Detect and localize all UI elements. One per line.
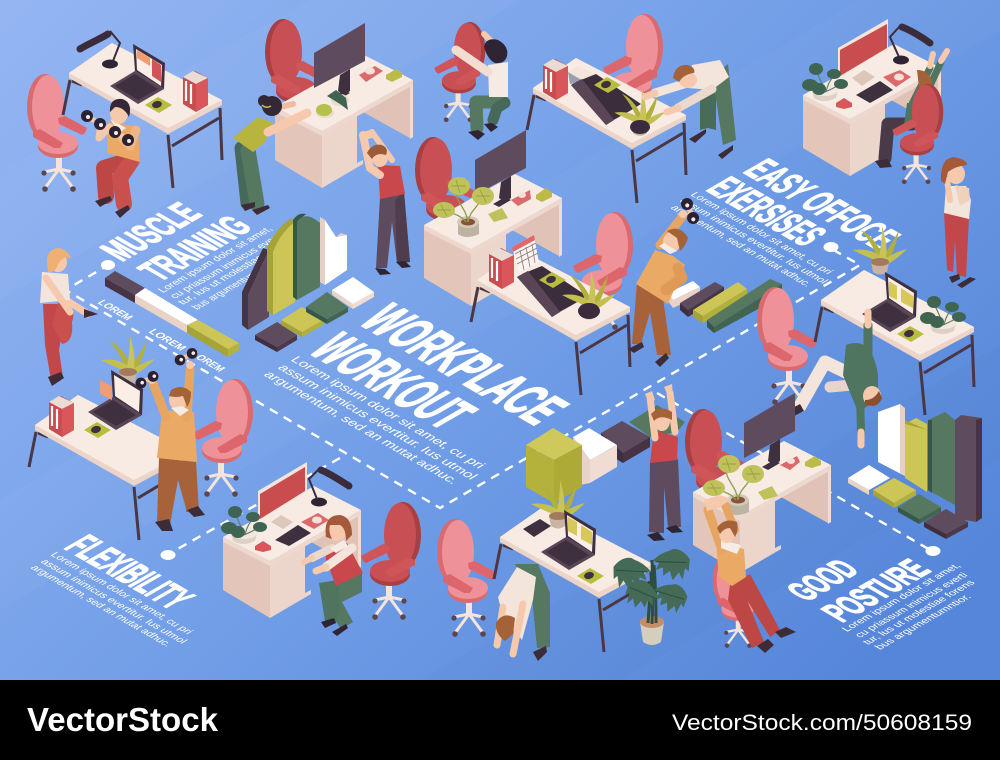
text block: flexibility: assum inimicus evertitur. Ius utmol — [37, 558, 189, 646]
chart: horizontal isometric bars with labels: LOREM — [145, 327, 189, 353]
text block: main description — [260, 354, 489, 486]
scene: solid desk with monitor and bending woman — [233, 19, 413, 215]
person: man lifting dumbbells overhead — [134, 342, 205, 531]
text block: flexibility: argumentum, sed an mutat adhuc. — [27, 564, 174, 649]
scene: bottom-right desk with plant — [685, 393, 831, 573]
chart: 3D block bars — [526, 405, 685, 503]
person: woman side stretch — [360, 129, 411, 275]
chart: tall isometric columns with slabs — [242, 214, 374, 352]
scene: solid desk with red screen and woman seated — [802, 19, 947, 184]
heading: Workplace Workout: WORKOUT — [296, 325, 490, 437]
heading: Flexibility: FLEXIBILITY — [55, 529, 204, 615]
person: seated woman hands behind head — [456, 34, 508, 140]
icon: calendar — [512, 235, 539, 272]
person: seated with arms up — [875, 51, 947, 168]
scene: center solid desk with plant — [415, 130, 562, 306]
heading: Good Posture — [778, 554, 940, 628]
text block: easy office exercises: assum inimicus evertitur. Ius utmol — [676, 197, 830, 286]
watermark band: VectorStock — [27, 701, 219, 738]
text block: easy office exercises: argumentum, sed an mutat adhuc. — [667, 204, 814, 289]
text block: good posture: bus argumentumntior. — [873, 593, 974, 652]
person: man dumbbell side stretch — [628, 196, 706, 367]
chart: horizontal isometric bars with labels — [94, 271, 239, 374]
text block: good posture: tur, lus ut molestiae forens — [861, 579, 978, 647]
scene: bottom-left desk and woman squatting — [221, 462, 421, 636]
person: seated man arms up — [704, 495, 796, 653]
person: woman stretching leg left — [40, 248, 98, 386]
icon: desk lamp — [309, 469, 349, 506]
heading: Workplace Workout: WORKPLACE — [346, 296, 582, 433]
text block: main description: Lorem ipsum dolor sit amet, cu pri — [287, 354, 489, 471]
scene: right desk with laptop and yoga woman — [757, 226, 974, 445]
person: woman arms raised — [645, 384, 683, 541]
scene: left desk with laptop and man lifting dumbbells — [29, 336, 253, 540]
text block: flexibility: Lorem ipsum dolor sit amet, cu pri — [47, 551, 195, 636]
person: man bending to desk — [645, 60, 736, 159]
text block: muscle training: cu priassum inimicus everti — [168, 232, 286, 301]
text block: good posture — [840, 562, 978, 652]
icon: desk lamp — [890, 26, 930, 64]
text block: good posture: Lorem ipsum dolor sit amet, — [840, 562, 964, 634]
scene: bottom desk with laptop, forward bend man — [437, 480, 653, 661]
text block: main description: argumentum, sed an mutat adhuc. — [260, 369, 463, 486]
text block: muscle training: tur, lus ut molestiae forens — [176, 237, 296, 307]
text block: easy office exercises: Lorem ipsum dolor sit amet, cu pri — [687, 191, 835, 276]
scene: desk with laptop and man lifting dumbbells — [27, 31, 222, 218]
watermark band — [0, 680, 1000, 760]
text block: muscle training: Lorem ipsum dolor sit amet, — [156, 225, 276, 295]
scene: woman stretching on chair — [434, 22, 508, 140]
icon: calculator — [523, 519, 551, 537]
person: woman squatting — [304, 515, 363, 636]
heading: Muscle Training: TRAINING — [130, 210, 261, 287]
text block: good posture: cu priassum inimicus everti — [853, 571, 971, 640]
person: man touching toes — [496, 564, 550, 661]
text block: muscle training — [156, 225, 296, 312]
heading: Muscle Training: MUSCLE — [92, 197, 211, 267]
chart: horizontal isometric bars with labels: LOREM — [94, 298, 135, 322]
scene: man seated stretching with chair — [704, 495, 796, 653]
scene: desk with laptop back and man bending — [527, 14, 736, 203]
chart: tall isometric columns right — [848, 404, 982, 539]
scene: center desk with laptop and calendar — [471, 212, 633, 395]
chart: slanted block bars — [668, 279, 782, 333]
heading: Easy Office Exersises — [697, 153, 910, 255]
icon: monstera plant — [609, 543, 694, 645]
text block: main description: assum inimicus evertitur. Ius utmol — [274, 362, 481, 482]
watermark band: VectorStock.com/50608159 — [672, 710, 972, 735]
chart: horizontal isometric bars with labels: LOREM — [187, 350, 227, 374]
text block: muscle training: bus argumentumntior. — [190, 260, 279, 312]
heading: Easy Office Exersises: EXERSISES — [697, 171, 837, 252]
person: woman leaning on desk — [233, 95, 307, 215]
person: man with dumbbells — [81, 99, 140, 218]
dashed connector lines — [66, 242, 940, 560]
heading: Workplace Workout — [296, 296, 582, 437]
heading: Good Posture: GOOD — [778, 554, 868, 607]
heading: Muscle Training — [92, 197, 261, 287]
person: woman in bridge pose — [785, 312, 882, 445]
person: standing woman right — [941, 157, 976, 288]
